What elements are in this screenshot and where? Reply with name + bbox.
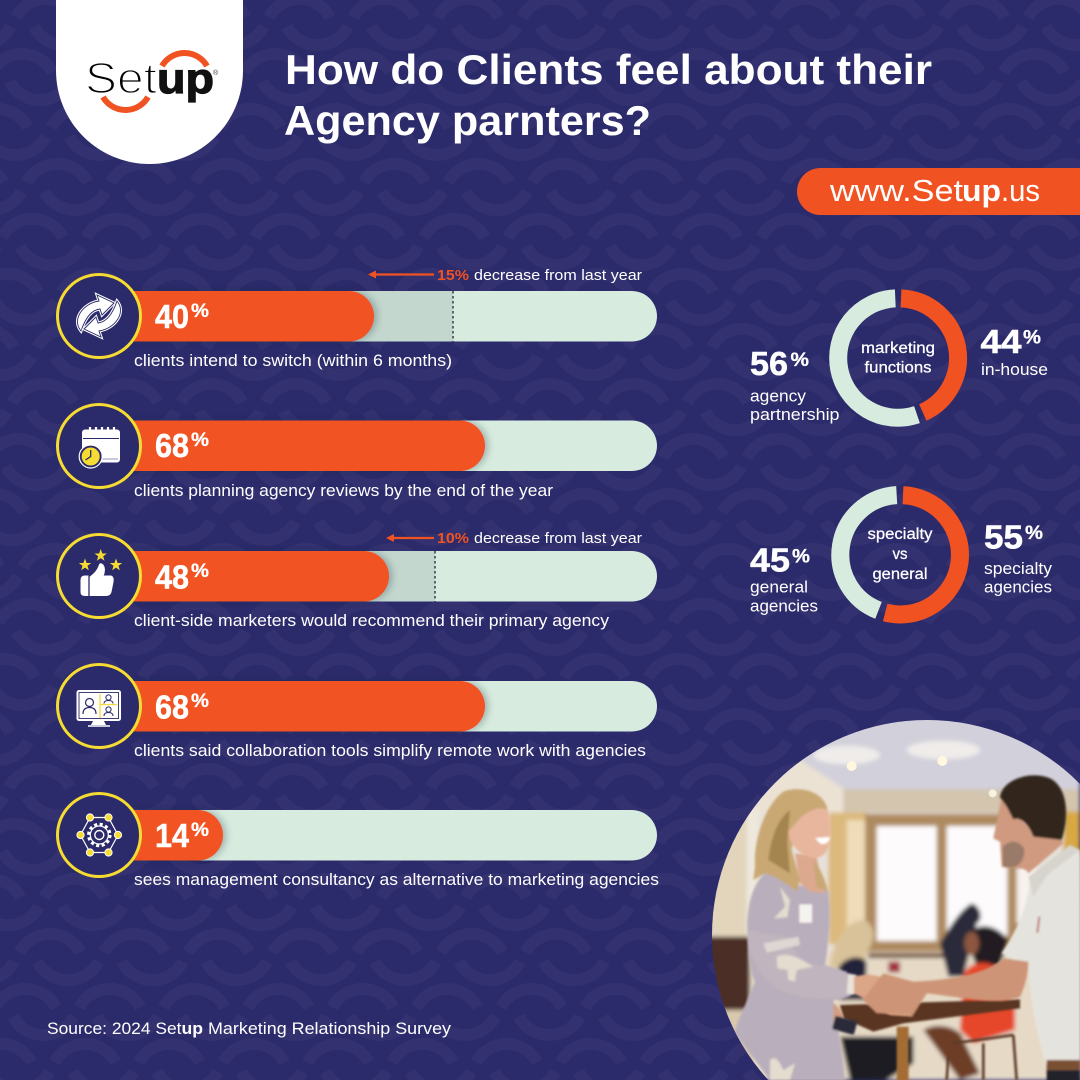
value 68%: 68 [155, 688, 189, 726]
decrease note 10%: 10% [437, 530, 469, 547]
donut panel: specialty vs general [750, 495, 1053, 616]
website pill: www.Set [829, 173, 963, 208]
bar track [100, 420, 657, 471]
caption: clients said collaboration tools simplify remote work with agencies [134, 741, 646, 760]
stat 55% specialty agencies: % [1025, 523, 1043, 544]
stat 44% in-house: 44 [980, 323, 1022, 360]
title: Agency parnters? [284, 97, 651, 144]
icon: switching arrows [58, 274, 140, 358]
donut centre label: marketing [861, 340, 935, 357]
stat 45% general agencies: agencies [750, 596, 818, 616]
donut panel: marketing functions [750, 298, 1048, 424]
photo table [840, 999, 1020, 1080]
value 68% [155, 688, 209, 726]
donut centre label [861, 340, 935, 376]
stat 55% specialty agencies [984, 518, 1053, 596]
value 14% [155, 817, 209, 854]
photo woman [735, 789, 913, 1080]
bar fill 48% [100, 551, 389, 602]
value 68% [155, 427, 209, 464]
donut ring: 56% agency partnership [838, 298, 917, 418]
value 14%: 14 [155, 817, 190, 854]
title [284, 46, 932, 144]
photo: two people shaking hands [700, 710, 1080, 1080]
bar track [100, 681, 657, 732]
logo bottom arc [103, 97, 148, 110]
stat 44% in-house: % [1023, 328, 1041, 348]
stat 55% specialty agencies: agencies [984, 578, 1052, 596]
logo wordmark Set: Set [85, 54, 157, 103]
row 1: clients intend to switch [58, 267, 657, 370]
donut centre label [868, 526, 933, 583]
value 48% [155, 558, 209, 596]
caption: client-side marketers would recommend their primary agency [134, 611, 610, 630]
stat 45% general agencies: general [750, 578, 808, 596]
website pill: up [962, 173, 1001, 208]
source note: Source: 2024 Set [47, 1019, 182, 1038]
source note [47, 1019, 452, 1038]
photo man [863, 775, 1080, 1080]
caption: clients intend to switch (within 6 months) [134, 351, 452, 370]
decrease note 15% [368, 267, 642, 284]
stat 45% general agencies: 45 [750, 542, 790, 578]
stat 56% agency partnership: agency [750, 386, 807, 406]
stat 44% in-house [980, 323, 1048, 379]
last-year marker [452, 291, 454, 342]
donut centre label: functions [864, 360, 932, 376]
donut ring: 45% general agencies [840, 495, 897, 610]
value 40%: 40 [155, 298, 189, 335]
row 2: agency reviews [58, 404, 657, 500]
donut centre label: vs [892, 546, 908, 563]
website pill: .us [1001, 173, 1040, 208]
donut ring: 55% specialty agencies [885, 495, 960, 614]
decrease note 15%: decrease from last year [474, 267, 642, 284]
stat 56% agency partnership [750, 345, 840, 424]
title: How do Clients feel about their [285, 46, 932, 93]
last-year shading [350, 551, 435, 602]
stat 56% agency partnership: 56 [750, 345, 788, 382]
stat 55% specialty agencies: 55 [984, 518, 1023, 556]
logo wordmark up: up [157, 55, 214, 103]
last-year marker [434, 551, 436, 602]
value 14%: % [191, 820, 209, 841]
source note: up [182, 1019, 203, 1038]
website pill [797, 168, 1080, 215]
row 3: recommend primary agency [58, 530, 657, 630]
value 68%: % [191, 430, 209, 451]
icon: video call monitor [58, 664, 140, 748]
decrease note 10% [386, 530, 642, 547]
photo ceiling lamps [847, 756, 997, 797]
bar track [100, 291, 657, 342]
decrease note 15%: 15% [437, 267, 469, 284]
value 48%: % [191, 561, 209, 582]
donut centre label: specialty [868, 526, 933, 543]
stat 56% agency partnership: partnership [750, 405, 840, 424]
icon: thumbs up with stars [58, 534, 140, 618]
value 68%: % [191, 691, 209, 712]
photo background room [700, 710, 1080, 1080]
logo registered mark: ® [213, 69, 219, 77]
donut centre label: general [872, 566, 928, 583]
stat 45% general agencies: % [792, 546, 810, 568]
icon: calendar and clock [58, 404, 140, 488]
row 4: collaboration tools [58, 664, 657, 760]
bar fill 14% [100, 810, 223, 860]
source note: Marketing Relationship Survey [208, 1019, 452, 1038]
caption: sees management consultancy as alternative to marketing agencies [134, 870, 659, 889]
value 68%: 68 [155, 427, 189, 464]
caption: clients planning agency reviews by the end of the year [134, 481, 553, 500]
bar track [100, 551, 657, 602]
value 40% [155, 298, 209, 335]
donut ring: 44% in-house [901, 298, 958, 412]
bar fill 68% [100, 681, 485, 732]
bar fill 40% [100, 291, 374, 342]
row 5: management consultancy [58, 794, 659, 889]
logo card [56, 0, 243, 164]
value 40%: % [191, 301, 209, 322]
stat 56% agency partnership: % [790, 350, 809, 371]
icon: gear network [58, 794, 140, 876]
logo top arc [162, 53, 207, 66]
stat 44% in-house: in-house [981, 360, 1048, 379]
bar fill 68% [100, 420, 485, 471]
stat 45% general agencies [750, 542, 818, 616]
decrease note 10%: decrease from last year [474, 530, 642, 547]
stat 55% specialty agencies: specialty [984, 559, 1053, 578]
value 48%: 48 [155, 558, 189, 596]
bar track [100, 810, 657, 860]
last-year shading [340, 291, 453, 342]
